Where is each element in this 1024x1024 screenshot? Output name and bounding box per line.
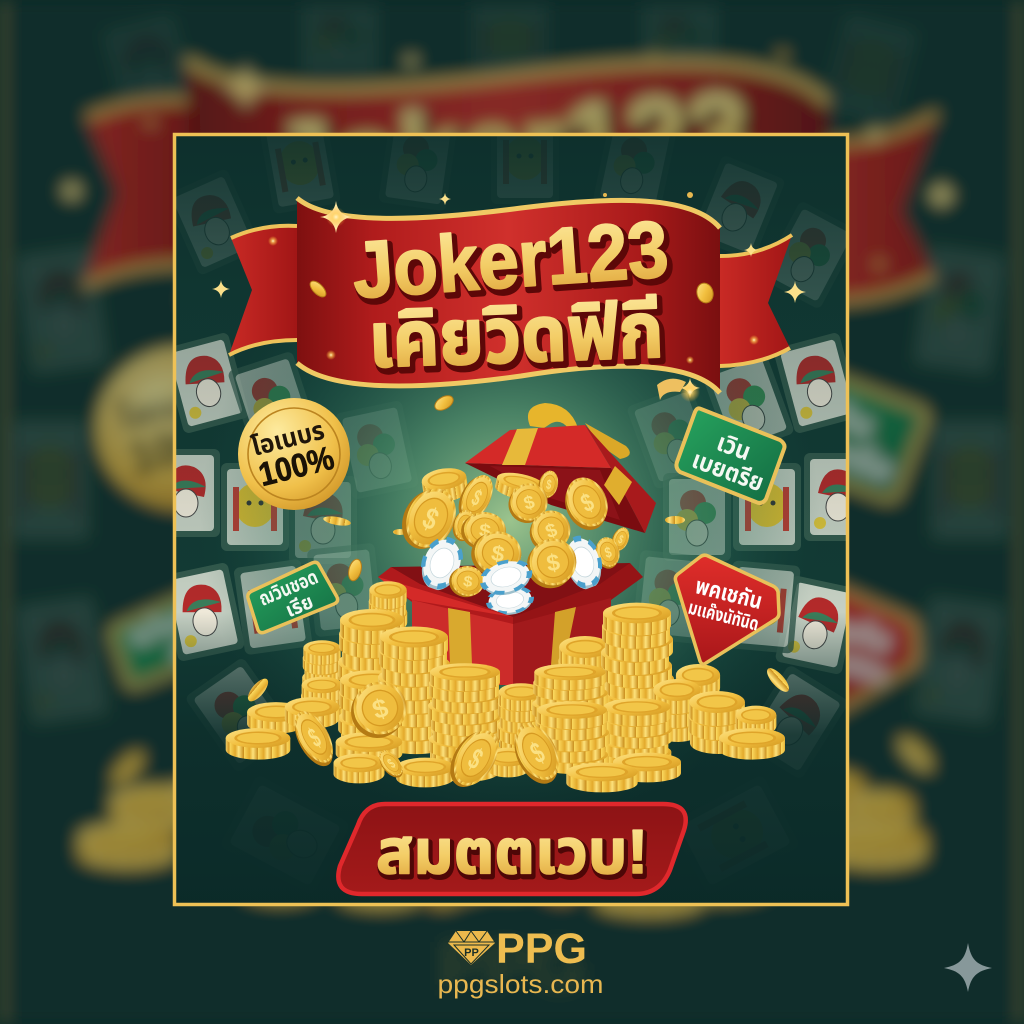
ribbon banner <box>229 198 792 393</box>
ribbon right tail <box>720 235 792 366</box>
badge: green left: ฌวินชอด <box>256 566 321 611</box>
gift box lid <box>465 403 656 533</box>
box interior <box>391 563 630 617</box>
badge: green top right <box>676 408 784 503</box>
logo wordmark: PPG <box>496 925 587 973</box>
icon: four point star <box>944 943 992 992</box>
title: Joker123: Joker123 <box>353 208 674 319</box>
coins flying from box <box>393 466 632 618</box>
blurred background: PPG <box>438 927 586 1005</box>
poster artwork <box>212 192 806 796</box>
ribbon left tail <box>229 226 297 355</box>
badge: green left: เรีย <box>282 591 317 622</box>
call to action button: สมตตเวบ! <box>378 821 650 890</box>
badge: red shield: พคเชกัน <box>693 572 765 614</box>
badge: red shield <box>675 555 779 664</box>
title: Joker123: Joker123 <box>350 204 671 315</box>
title: Thai line: เคิยวิดฟิกี <box>367 286 665 384</box>
badge: bonus 100%: 100% <box>255 439 338 493</box>
title: Thai line: เคิยวิดฟิกี <box>370 290 668 388</box>
badge: bonus 100%: โอเนบร <box>248 415 327 462</box>
badge: green left <box>248 562 338 633</box>
website url: ppgslots.com <box>438 969 604 999</box>
sparkles and small flying coins <box>212 192 806 705</box>
badge: green top right: เวิน <box>713 429 754 466</box>
badge: green top right: เบยตรีย <box>688 446 767 497</box>
ribbon centre <box>297 198 720 393</box>
PPG logo <box>438 925 604 999</box>
icon: diamond <box>448 931 495 965</box>
coin stacks <box>226 581 785 792</box>
badge: red shield: มเเค๊งนัทันิด <box>686 597 761 636</box>
main poster panel <box>152 115 872 905</box>
badge: bonus 100% <box>238 398 350 510</box>
joker card pattern <box>152 115 872 896</box>
tilted dollar coins <box>286 675 569 796</box>
gift box <box>378 403 656 685</box>
panel background <box>152 115 872 905</box>
call to action button <box>338 804 686 894</box>
panel border <box>174 134 848 904</box>
box flaps and front <box>378 563 643 685</box>
call to action button: สมตตเวบ! <box>376 818 648 887</box>
icon: diamond: PP <box>464 947 479 959</box>
